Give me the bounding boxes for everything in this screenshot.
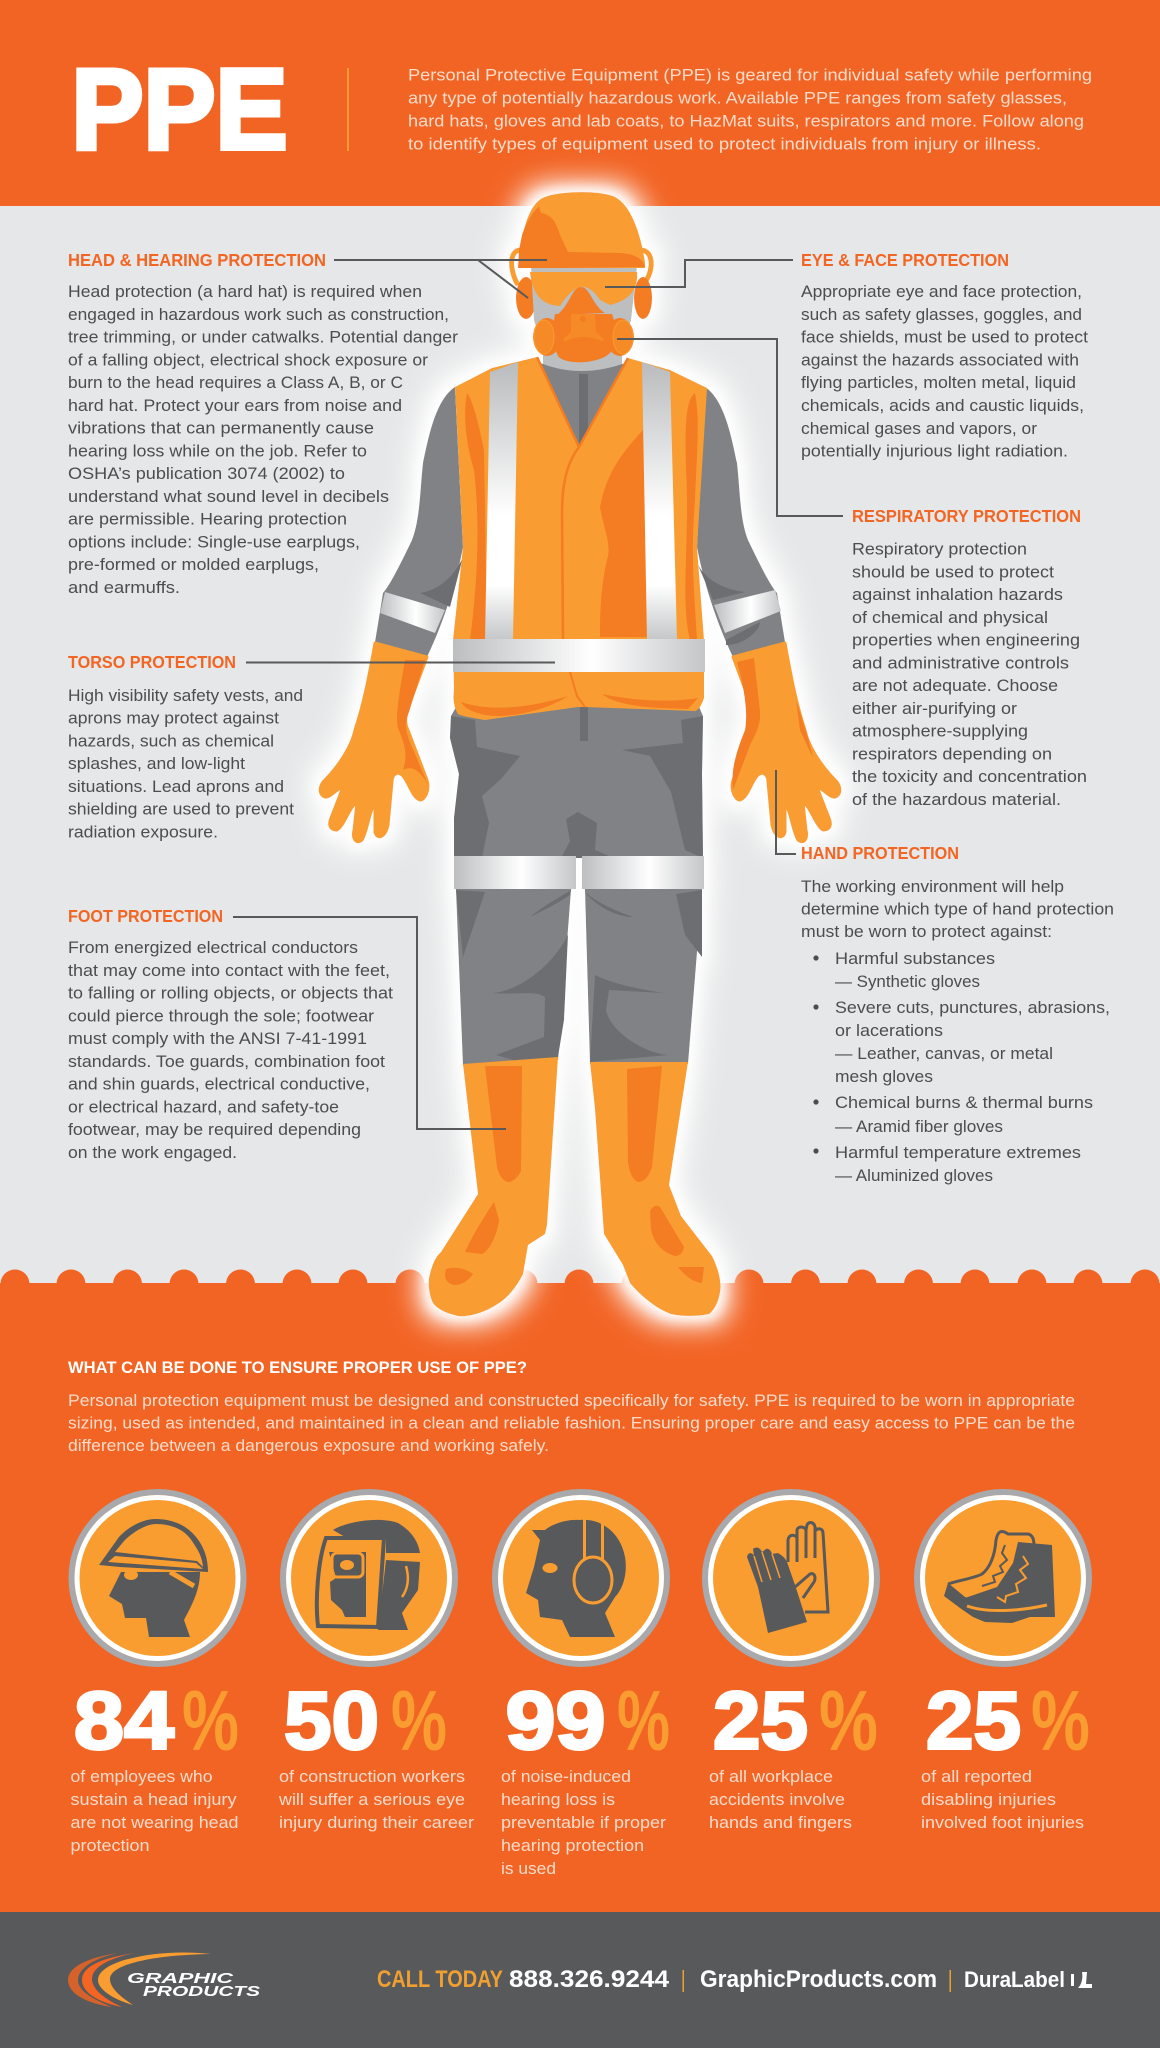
statistic: % [182,1674,239,1769]
body text: should be used to protect [852,562,1054,581]
body text [852,540,1087,809]
body text: hard hat. Protect your ears from noise and [68,396,402,415]
panel: eye and face protection [801,250,1088,461]
call to action: CALL TODAY [377,1966,503,1993]
body text: respirators depending on [852,744,1052,763]
caption: accidents involve [709,1790,845,1809]
icon: gloves [705,1492,877,1664]
body text: such as safety glasses, goggles, and [801,305,1082,324]
icon: head with hard hat [72,1492,244,1664]
intro text: to identify types of equipment used to protect individuals from injury or illness. [408,134,1041,154]
heading: RESPIRATORY PROTECTION [852,506,1081,526]
glove type list: Harmful substances [835,949,995,968]
body text: are permissible. Hearing protection [68,510,347,528]
ear muffs [516,277,652,319]
title: PPE [72,46,288,174]
call to action: DuraLabel [964,1967,1065,1992]
body text: OSHA’s publication 3074 (2002) to [68,464,345,483]
section text: proper use: sizing, used as intended, and maintained in a clean and reliable fashion. Ensuring proper care and easy access to PPE can be the [68,1414,1075,1432]
body text: Head protection (a hard hat) is required when [68,282,422,301]
caption: of construction workers [279,1767,465,1786]
heading: EYE & FACE PROTECTION [801,250,1009,270]
left glove [320,643,428,842]
body text: could pierce through the sole; footwear [68,1006,374,1025]
caption: hearing protection [501,1836,644,1855]
statistic: % [391,1674,447,1769]
call to action: GraphicProducts.com [700,1966,937,1993]
caption: preventable if proper [501,1813,666,1832]
body text: of a falling object, electrical shock exposure or [68,350,428,369]
statistic [74,1674,239,1769]
panel: torso protection [68,652,303,842]
body text: against inhalation hazards [852,585,1063,604]
statistic [506,1674,670,1769]
body text: properties when engineering [852,630,1080,650]
section text: proper use: Personal protection equipment must be designed and constructed specifically for safety. PPE is required to be worn in appropriate [68,1391,1075,1410]
body text: and shin guards, electrical conductive, [68,1074,370,1094]
body text: determine which type of hand protection [801,900,1114,918]
icon: DuraLabel mark [1071,1972,1092,1988]
statistic: 25 [713,1676,808,1766]
caption [70,1767,238,1855]
statistic: 50 [284,1676,379,1766]
caption: protection [70,1836,150,1855]
body text: splashes, and low-light [68,754,245,773]
logo: Graphic Products [68,1952,260,2007]
body text: face shields, must be used to protect [801,328,1088,347]
caption [278,1767,474,1832]
body text: footwear, may be required depending [68,1120,361,1139]
nose piece [557,287,605,315]
caption [501,1767,666,1878]
body text [68,686,303,842]
stat: head injury [70,1492,244,1855]
body text: vibrations that can permanently cause [68,418,374,438]
body text: Appropriate eye and face protection, [801,282,1082,301]
glove type list: mesh gloves [835,1067,933,1086]
body text: pre-formed or molded earplugs, [68,555,319,574]
glove type list: — Aluminized gloves [835,1166,993,1185]
trousers [450,700,703,1066]
footer band [0,1912,1160,2048]
heading: FOOT PROTECTION [68,906,223,926]
body text: High visibility safety vests, and [68,686,303,705]
body text: must comply with the ANSI 7-41-1991 [68,1029,367,1048]
trouser reflective bands [454,856,704,889]
shirt sleeves [375,387,785,657]
icon: boots [917,1492,1089,1664]
body text: are not adequate. Choose [852,676,1058,695]
intro text [408,66,1092,154]
body text: to falling or rolling objects, or objects that [68,984,393,1002]
intro text: hard hats, gloves and lab coats, to HazMat suits, respirators and more. Follow along [408,112,1084,130]
glove type list: — Aramid fiber gloves [835,1117,1003,1136]
stat: hearing loss [495,1492,670,1878]
caption: of all workplace [709,1767,833,1786]
panel: head and hearing protection [68,250,458,597]
section text: proper use: difference between a dangerous exposure and working safely. [68,1436,549,1455]
body text: of the hazardous material. [852,790,1061,809]
body text: flying particles, molten metal, liquid [801,373,1076,392]
caption: sustain a head injury [70,1790,237,1809]
panel: hand protection [801,843,1114,1185]
body text: of chemical and physical [852,608,1048,627]
body text: hazards, such as chemical [68,732,274,750]
section text: proper use [68,1391,1075,1455]
left boot [429,1057,558,1316]
body text [801,282,1088,461]
header divider [347,68,349,151]
body text: must be worn to protect against: [801,922,1052,941]
caption: of employees who [70,1767,212,1786]
caption: are not wearing head [70,1813,238,1832]
glove type list: or lacerations [835,1021,943,1040]
caption: of all reported [921,1767,1032,1786]
body text: and administrative controls [852,653,1069,672]
body text [68,282,458,597]
high visibility vest [453,357,707,720]
logo: Graphic Products: GRAPHIC [127,1971,234,1987]
statistic [284,1674,447,1769]
body text: engaged in hazardous work such as construction, [68,305,449,324]
right boot [590,1062,721,1316]
body text: burn to the head requires a Class A, B, or C [68,373,403,392]
statistic [926,1674,1090,1769]
caption [921,1767,1084,1832]
caption: of noise-induced [501,1767,631,1786]
call to action [377,1966,1092,1993]
statistic: 84 [74,1676,174,1766]
body text: shielding are used to prevent [68,800,294,818]
statistic: % [617,1674,670,1769]
worker figure in full PPE [320,192,840,1316]
body text [68,938,393,1162]
respirator mask [533,314,634,362]
panel: respiratory protection [852,506,1087,809]
caption: will suffer a serious eye [278,1790,465,1809]
panel: foot protection [68,906,393,1162]
body text: or electrical hazard, and safety-toe [68,1097,339,1116]
goggles [530,272,637,306]
body text: atmosphere-supplying [852,722,1028,740]
header band [0,0,1160,206]
body text: chemical gases and vapors, or [801,419,1037,438]
body text: situations. Lead aprons and [68,777,284,796]
statistic [713,1674,878,1769]
callout lines [233,260,843,1129]
body text: aprons may protect against [68,708,279,728]
stat: foot injuries [917,1492,1090,1832]
caption: disabling injuries [921,1790,1056,1809]
body text: understand what sound level in decibels [68,487,389,506]
body text: either air-purifying or [852,699,1017,718]
glove type list: — Leather, canvas, or metal [835,1044,1053,1063]
stat: hand accidents [705,1492,878,1832]
scalloped orange lower section [0,1270,1160,1923]
vest reflective waist band [453,639,705,672]
arm reflective bands [380,590,781,633]
caption: hearing loss is [501,1790,615,1809]
body text: The working environment will help [801,877,1064,896]
body text: the toxicity and concentration [852,767,1087,786]
icon: head with ear muffs [495,1492,667,1664]
right glove [732,643,840,842]
caption: hands and fingers [709,1813,852,1832]
statistic: % [1031,1674,1090,1769]
body text: that may come into contact with the feet, [68,961,390,980]
intro text: Personal Protective Equipment (PPE) is geared for individual safety while performing [408,66,1092,84]
call to action: 888.326.9244 [509,1966,670,1993]
body text: radiation exposure. [68,822,218,842]
face and neck [531,266,637,377]
caption: involved foot injuries [921,1813,1084,1832]
body text: against the hazards associated with [801,350,1079,369]
heading: TORSO PROTECTION [68,652,236,672]
heading: HEAD & HEARING PROTECTION [68,250,326,270]
icon: head with face shield [283,1492,455,1664]
ear muff band [512,250,651,285]
vest reflective straps [485,362,677,640]
caption [709,1767,852,1832]
body text: standards. Toe guards, combination foot [68,1052,385,1071]
statistic: 99 [506,1676,606,1766]
body text: hearing loss while on the job. Refer to [68,441,367,460]
heading: HAND PROTECTION [801,843,959,863]
body text: From energized electrical conductors [68,938,358,957]
statistic: 25 [926,1676,1021,1766]
shirt collar [538,362,628,447]
intro text: any type of potentially hazardous work. Available PPE ranges from safety glasses, [408,88,1067,108]
body text: potentially injurious light radiation. [801,442,1068,461]
body text [801,877,1114,941]
body text: Respiratory protection [852,540,1027,558]
hard hat [518,192,645,268]
statistic: % [819,1674,878,1769]
body text: on the work engaged. [68,1143,237,1162]
body text: options include: Single-use earplugs, [68,532,360,551]
logo: Graphic Products: PRODUCTS [143,1984,260,2000]
glove type list: — Synthetic gloves [835,972,980,991]
caption: injury during their career [279,1813,474,1832]
section heading: proper use: WHAT CAN BE DONE TO ENSURE PROPER USE OF PPE? [68,1358,527,1377]
glove type list: Chemical burns & thermal burns [835,1093,1093,1112]
glove type list: Harmful temperature extremes [835,1143,1081,1162]
stat: eye injury [278,1492,474,1832]
body text: chemicals, acids and caustic liquids, [801,396,1084,415]
body text: and earmuffs. [68,578,180,597]
glove type list [813,949,1110,1185]
glove type list: Severe cuts, punctures, abrasions, [835,998,1110,1017]
caption: is used [501,1859,556,1878]
body text: tree trimming, or under catwalks. Potential danger [68,328,458,346]
